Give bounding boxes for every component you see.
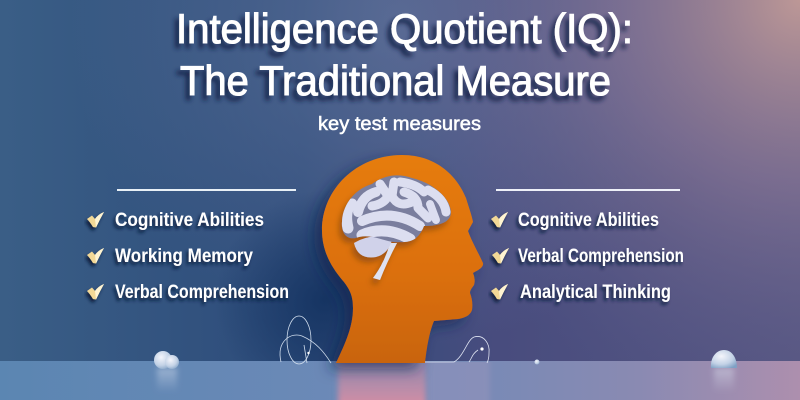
item: Analytical Thinking: Analytical Thinking	[520, 282, 671, 303]
cerebrum	[342, 175, 451, 242]
item: Verbal Comprehension: Verbal Comprehension	[518, 246, 684, 267]
item: Working Memory: Working Memory	[115, 246, 253, 267]
icon: small sphere	[534, 360, 540, 364]
cerebellum	[354, 237, 392, 257]
icon: left sphere	[154, 351, 179, 392]
title	[176, 5, 633, 104]
item: Verbal Comprehension: Verbal Comprehension	[115, 282, 289, 303]
decorative line loop right	[425, 336, 489, 363]
decorative line loops left	[280, 316, 331, 364]
item: Cognitive Abilities: Cognitive Abilities	[518, 210, 659, 231]
floor	[0, 358, 800, 400]
icon: right sphere	[711, 350, 737, 392]
title: The Traditional Measure	[180, 57, 611, 104]
panel: left list	[87, 189, 296, 303]
item: Cognitive Abilities: Cognitive Abilities	[115, 210, 264, 231]
brain stem	[373, 243, 397, 280]
brain folds	[347, 182, 446, 239]
icon: orange head silhouette	[322, 155, 483, 363]
right divider	[496, 189, 680, 191]
title: Intelligence Quotient (IQ):	[176, 5, 633, 52]
panel: right list	[491, 189, 684, 303]
icon: brain	[342, 175, 451, 280]
subtitle: key test measures	[318, 114, 481, 135]
left divider	[117, 189, 296, 191]
